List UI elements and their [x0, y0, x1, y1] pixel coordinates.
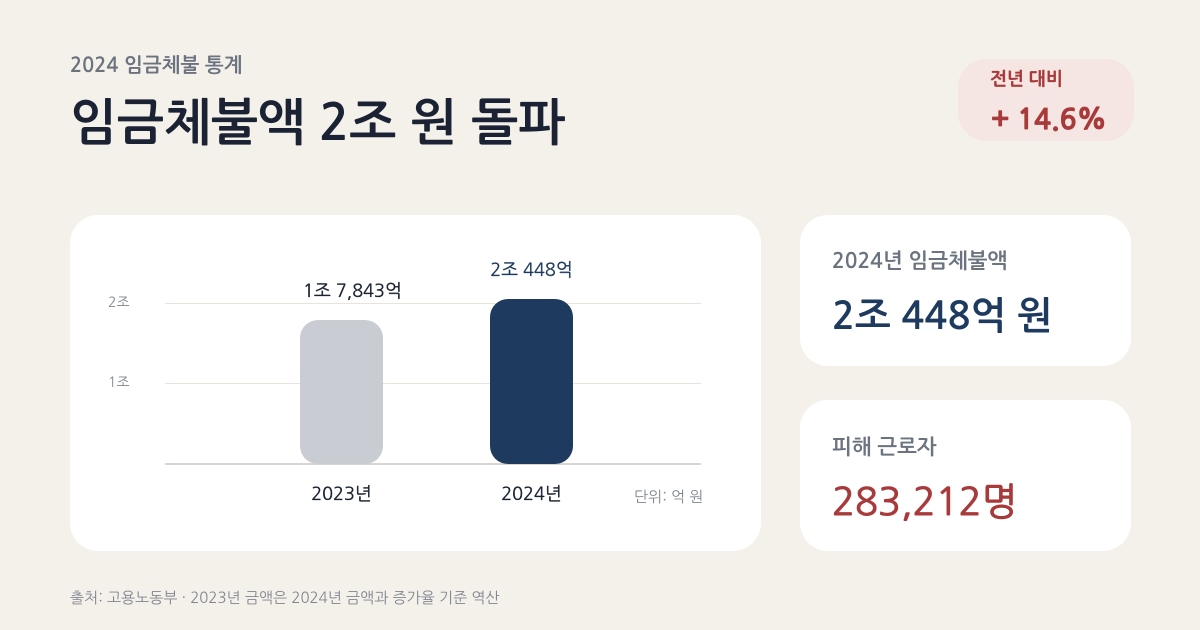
axis label: 2조: 2조	[108, 296, 130, 310]
eyebrow: 2024 임금체불 통계	[70, 55, 242, 75]
value label: 2023: 1조 7,843억	[303, 282, 402, 300]
panel: affected workers	[800, 400, 1131, 551]
badge label: 전년 대비	[990, 70, 1063, 88]
value label: 2024: 2조 448억	[490, 261, 573, 279]
axis label: 1조: 1조	[108, 376, 130, 390]
gridlines and baseline	[165, 303, 701, 465]
badge value: + 14.6%	[991, 106, 1107, 134]
category label: 2024: 2024년	[501, 485, 562, 503]
total amount label: 2024년 임금체불액	[832, 251, 1007, 272]
workers label: 피해 근로자	[832, 437, 937, 458]
unit note: 단위: 억 원	[634, 490, 703, 505]
badge: year-over-year change	[958, 59, 1134, 141]
panel: bar chart	[70, 215, 761, 551]
source note: 출처: 고용노동부 · 2023년 금액은 2024년 금액과 증가율 기준 역산	[70, 591, 500, 606]
title: 임금체불액 2조 원 돌파	[70, 99, 565, 148]
chart area	[108, 260, 703, 505]
total amount value: 2조 448억 원	[832, 297, 1053, 335]
bar: 2023	[300, 320, 383, 464]
category label: 2023: 2023년	[311, 485, 372, 503]
panel: total amount	[800, 215, 1131, 366]
bar: 2024	[490, 299, 573, 464]
workers value: 283,212명	[832, 483, 1017, 521]
